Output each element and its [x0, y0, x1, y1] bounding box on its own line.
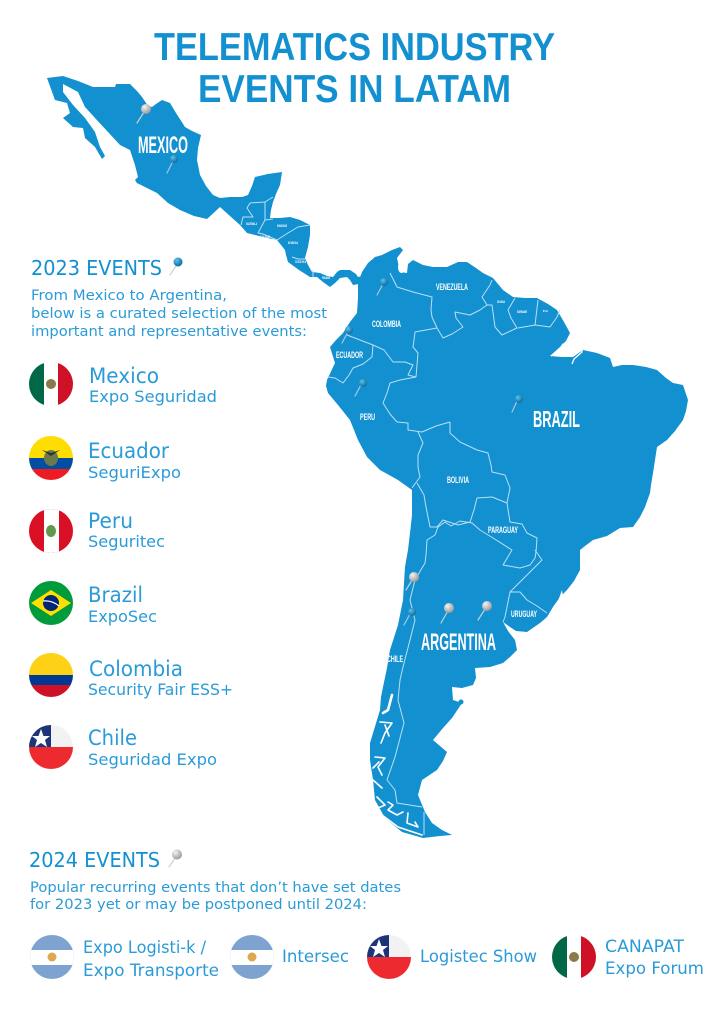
map of Latin America — [47, 76, 688, 838]
event: Intersec: Intersec — [282, 947, 349, 966]
title: TELEMATICS INDUSTRY — [154, 26, 555, 69]
event: Mexico — [29, 362, 217, 406]
event: Expo Logisti-k / Expo Transporte: Expo Logisti-k / — [83, 938, 206, 957]
icon: grey pin — [169, 850, 182, 867]
event: Peru: Peru — [88, 509, 133, 533]
map: Lake Maracaibo — [398, 261, 405, 273]
flag: Mexico — [29, 362, 73, 406]
intro text 2024: for 2023 yet or may be postponed until 2024: — [30, 897, 367, 913]
map: event pins — [137, 104, 523, 625]
map: country labels: ECUADOR — [336, 350, 363, 361]
map: country labels: EL SALVADOR — [260, 235, 270, 239]
event: CANAPAT Expo Forum: Expo Forum — [605, 959, 704, 978]
title — [154, 26, 555, 111]
map: country labels: HONDURAS — [277, 224, 287, 228]
event: Logistec Show — [367, 935, 537, 979]
map: country labels: BOLIVIA — [447, 475, 469, 486]
event: Chile — [29, 725, 217, 769]
map: country labels: GUYANA — [497, 300, 505, 304]
map: country borders — [241, 197, 560, 835]
event: Mexico: Mexico — [89, 364, 159, 388]
intro text 2023: below is a curated selection of the most — [31, 306, 327, 322]
event: Brazil — [29, 581, 157, 626]
intro text 2023 — [31, 288, 327, 340]
map: country labels: GUATEMALA — [246, 222, 257, 226]
map: country labels: ARGENTINA — [421, 629, 496, 656]
intro text 2024: Popular recurring events that don’t have set dates — [30, 880, 401, 896]
flag: Brazil — [29, 581, 73, 625]
event: Ecuador: Ecuador — [88, 439, 169, 463]
event: CANAPAT Expo Forum — [552, 935, 704, 979]
event: Peru: Seguritec — [88, 532, 165, 551]
event: Intersec — [230, 935, 349, 979]
event: Colombia: Security Fair ESS+ — [88, 680, 233, 699]
flag: Chile — [29, 725, 73, 769]
map: Patagonian fjords — [373, 695, 422, 835]
heading: 2023 events: 2023 EVENTS — [31, 256, 162, 280]
event: CANAPAT Expo Forum: CANAPAT — [605, 937, 685, 956]
map: coastal bay — [458, 700, 464, 704]
intro text 2024 — [30, 880, 401, 913]
event: Mexico: Expo Seguridad — [89, 387, 217, 406]
map: country labels: CHILE — [387, 654, 403, 665]
title: EVENTS IN LATAM — [198, 68, 511, 111]
map: country labels: NICARAGUA — [288, 241, 298, 245]
icon: blue pin — [170, 258, 182, 275]
event: Expo Logisti-k / Expo Transporte — [30, 935, 219, 980]
map: Rio de la Plata lagoon — [553, 590, 563, 608]
event: Chile: Seguridad Expo — [88, 750, 217, 769]
map: country labels: URUGUAY — [511, 609, 537, 620]
map: country labels: FG — [543, 309, 549, 313]
event: Ecuador — [29, 436, 181, 482]
flag: Peru — [29, 509, 73, 553]
flag: Argentina — [230, 935, 274, 979]
map: Amazon delta — [551, 344, 582, 364]
map: country labels: PERU — [360, 412, 375, 423]
intro text 2023: From Mexico to Argentina, — [31, 288, 227, 304]
event: Colombia: Colombia — [89, 657, 183, 681]
map: country labels: PANAMA — [322, 276, 330, 280]
event: Ecuador: SeguriExpo — [88, 463, 181, 482]
flag: Chile — [367, 935, 411, 979]
event: Peru — [29, 509, 165, 553]
event: Chile: Chile — [88, 726, 137, 750]
event: Expo Logisti-k / Expo Transporte: Expo Transporte — [83, 961, 219, 980]
map: country labels: PARAGUAY — [488, 525, 518, 536]
map: country labels: BRAZIL — [533, 406, 580, 432]
event: Logistec Show: Logistec Show — [420, 947, 537, 966]
intro text 2023: important and representative events: — [31, 324, 307, 340]
map: South America — [326, 247, 688, 838]
heading: 2024 events: 2024 EVENTS — [29, 848, 160, 872]
map: country labels: SURINAME — [517, 310, 527, 314]
map: country labels: COSTA RICA — [295, 260, 306, 264]
flag: Argentina — [30, 935, 74, 979]
flag: Colombia — [29, 653, 73, 697]
event: Colombia — [29, 653, 233, 699]
map: country labels — [138, 132, 580, 665]
map: country labels: MEXICO — [138, 132, 188, 159]
map: country labels: COLOMBIA — [372, 319, 401, 330]
map: Mexico and Central America — [47, 76, 362, 287]
map: country labels: VENEZUELA — [436, 282, 468, 293]
event: Brazil: Brazil — [88, 583, 143, 607]
event: Brazil: ExpoSec — [88, 607, 157, 626]
flag: Mexico — [552, 935, 596, 979]
flag: Ecuador — [29, 436, 73, 480]
